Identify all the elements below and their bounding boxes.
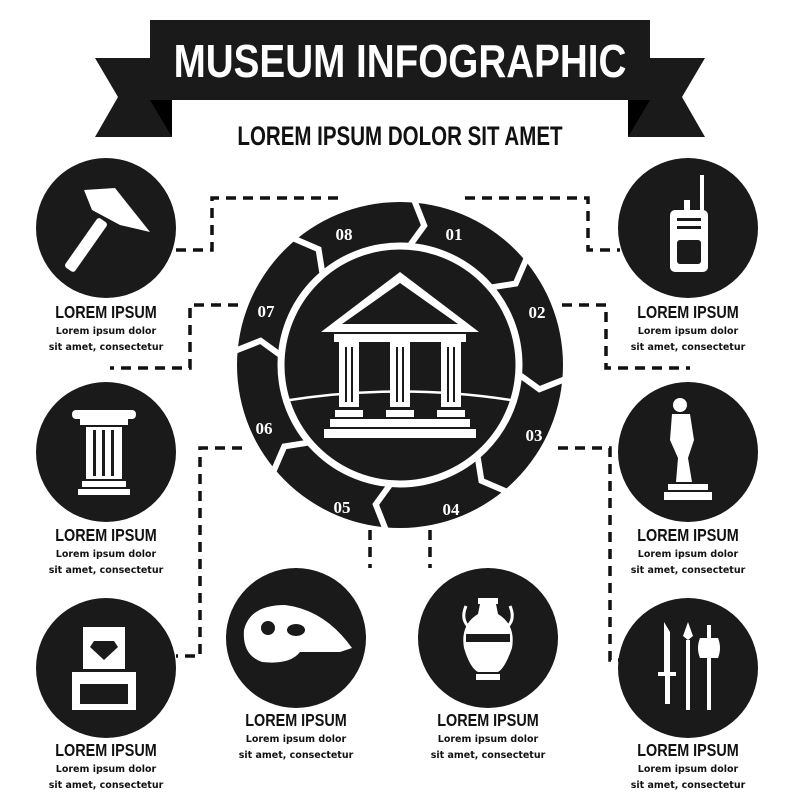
panel: top-left hammer: sit amet, consectetur (49, 342, 164, 353)
panel: bottom-right weapons (618, 598, 758, 791)
central wheel: 04 (442, 500, 460, 519)
icon: sword spear axe (658, 622, 720, 710)
panel: mid-left column: sit amet, consectetur (49, 565, 164, 576)
panel: bottom-right weapons: LOREM IPSUM (637, 741, 739, 760)
panel: bottom vase: Lorem ipsum dolor (438, 734, 539, 745)
panel: top-left hammer: LOREM IPSUM (55, 303, 157, 322)
panel: mid-right statue: sit amet, consectetur (631, 565, 746, 576)
dashed connectors (110, 198, 690, 660)
central wheel: 07 (258, 302, 275, 321)
panel: bottom-left diamond (36, 598, 176, 791)
icon: walkie-talkie (670, 175, 708, 272)
panel: bottom vase: LOREM IPSUM (437, 711, 539, 730)
icon: statue (664, 398, 712, 500)
central wheel: 01 (446, 225, 462, 244)
icon: temple (321, 272, 479, 438)
panel: mid-left column: LOREM IPSUM (55, 526, 157, 545)
title: MUSEUM INFOGRAPHIC (174, 36, 626, 87)
central wheel: 02 (528, 303, 546, 322)
panel: bottom-left diamond: Lorem ipsum dolor (56, 764, 157, 775)
icon: dino skull (244, 605, 352, 663)
panel: bottom vase (418, 568, 558, 761)
panel: mid-right statue: Lorem ipsum dolor (638, 549, 739, 560)
panel: top-right radio: sit amet, consectetur (631, 342, 746, 353)
panel: bottom dinosaur skull: Lorem ipsum dolor (246, 734, 347, 745)
panel: bottom vase: sit amet, consectetur (431, 750, 546, 761)
icon: ionic column (72, 410, 136, 495)
central wheel: 06 (256, 419, 272, 438)
panel: mid-left column: Lorem ipsum dolor (56, 549, 157, 560)
central wheel: 05 (334, 498, 350, 517)
panel: bottom-left diamond: LOREM IPSUM (55, 741, 157, 760)
central wheel (236, 201, 564, 529)
icon: diamond display (72, 627, 136, 710)
panel: bottom dinosaur skull: sit amet, consectetur (239, 750, 354, 761)
icon: stone hammer (64, 188, 150, 273)
panel: bottom dinosaur skull (226, 568, 366, 761)
panel: bottom dinosaur skull: LOREM IPSUM (245, 711, 347, 730)
panel: mid-right statue (618, 382, 758, 576)
panel: bottom-left diamond: sit amet, consectetur (49, 780, 164, 791)
panel: top-right radio (618, 158, 758, 353)
panel: top-right radio: LOREM IPSUM (637, 303, 739, 322)
panel: top-right radio: Lorem ipsum dolor (638, 326, 739, 337)
central wheel: 08 (336, 225, 352, 244)
panel: mid-left column (36, 382, 176, 576)
panel: top-left hammer (36, 158, 176, 353)
icon: amphora (463, 598, 513, 680)
subtitle: LOREM IPSUM DOLOR SIT AMET (237, 121, 563, 152)
panel: mid-right statue: LOREM IPSUM (637, 526, 739, 545)
central wheel: 03 (526, 426, 542, 445)
panel: bottom-right weapons: sit amet, consectetur (631, 780, 746, 791)
panel: top-left hammer: Lorem ipsum dolor (56, 326, 157, 337)
panel: bottom-right weapons: Lorem ipsum dolor (638, 764, 739, 775)
banner (95, 20, 705, 137)
